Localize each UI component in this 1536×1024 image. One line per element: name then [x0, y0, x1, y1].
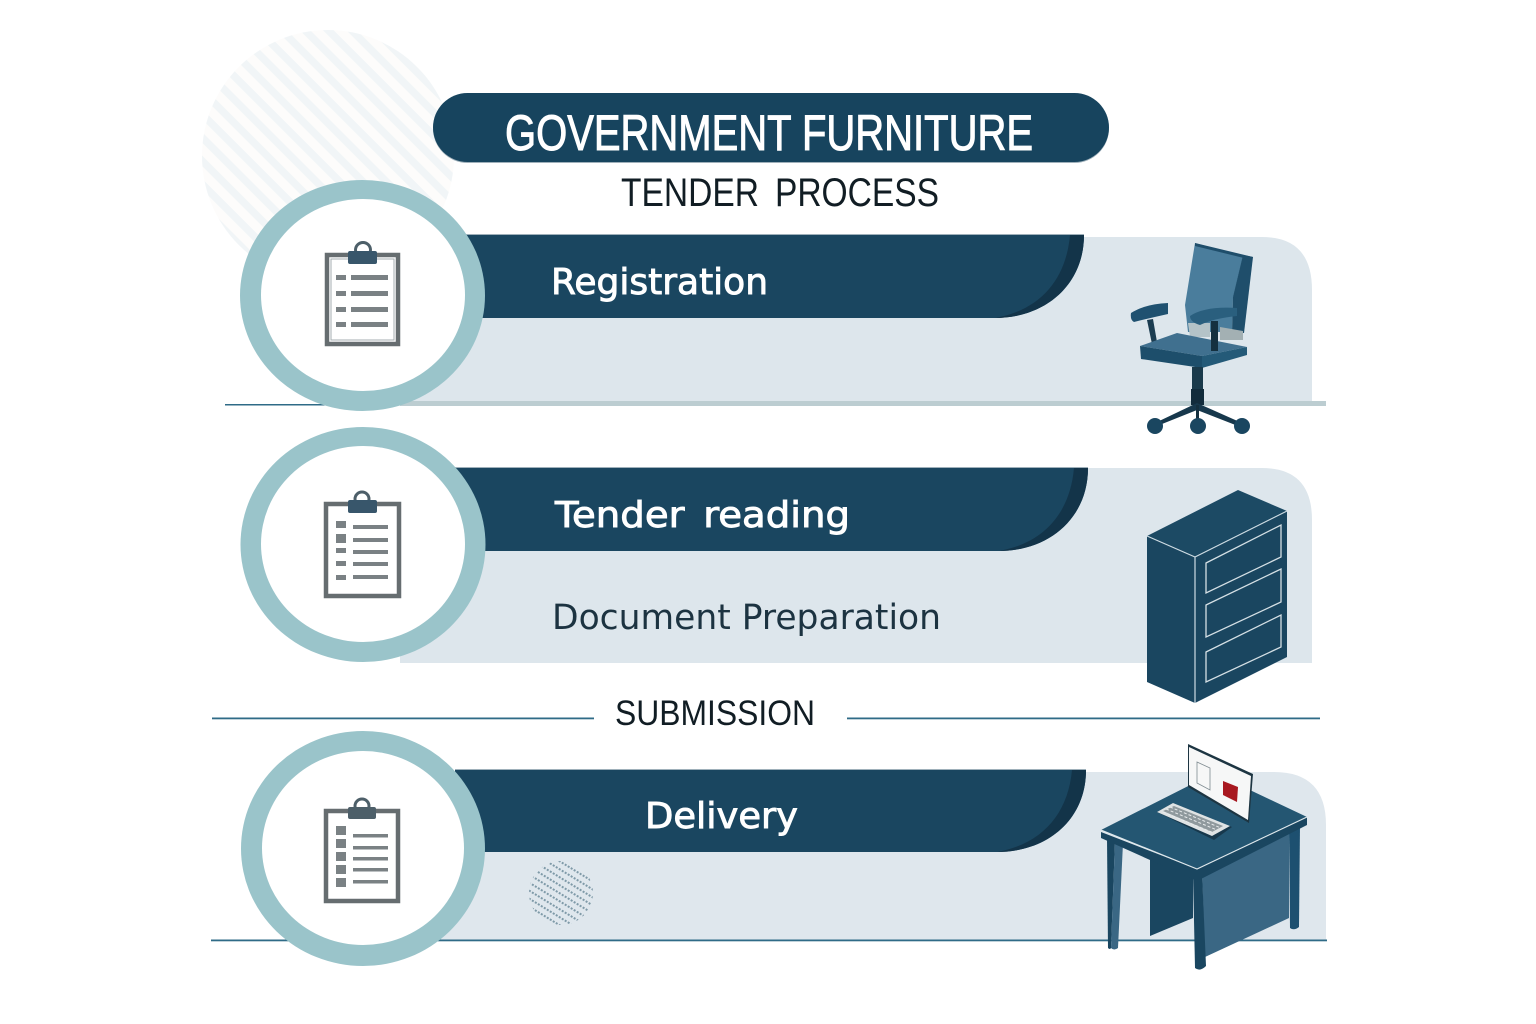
ring icon: registration: [240, 180, 485, 411]
monitor: [1188, 744, 1253, 823]
step label: tender reading: Tender reading: [554, 495, 850, 536]
illustration: desk with computer: [1101, 744, 1307, 970]
illustration: filing cabinet: [1147, 490, 1287, 703]
icon: clipboard: [327, 242, 398, 344]
icon: clipboard: [326, 492, 399, 596]
keyboard: [1157, 803, 1232, 840]
panel: delivery background: [211, 772, 1327, 941]
title pill: [433, 93, 1109, 163]
bar: delivery: [455, 769, 1086, 852]
decorative dotted circle: [529, 861, 593, 925]
bar: registration: [465, 234, 1084, 318]
illustration: office chair: [1131, 243, 1253, 434]
title text: GOVERNMENT FURNITURE: [505, 105, 1033, 161]
bar: tender reading: [455, 467, 1088, 551]
panel: tender reading background: [400, 468, 1312, 663]
panel: registration background: [225, 237, 1326, 406]
subtitle: TENDER PROCESS: [621, 171, 939, 215]
icon: clipboard: [326, 799, 398, 901]
step label: registration: Registration: [551, 262, 768, 303]
step label: document preparation: Document Preparation: [552, 598, 941, 638]
ring icon: delivery: [241, 731, 485, 966]
step label: delivery: Delivery: [645, 796, 798, 837]
decorative striped circle: [202, 30, 454, 282]
ring icon: tender reading: [240, 427, 486, 662]
step label: submission: SUBMISSION: [615, 694, 815, 733]
